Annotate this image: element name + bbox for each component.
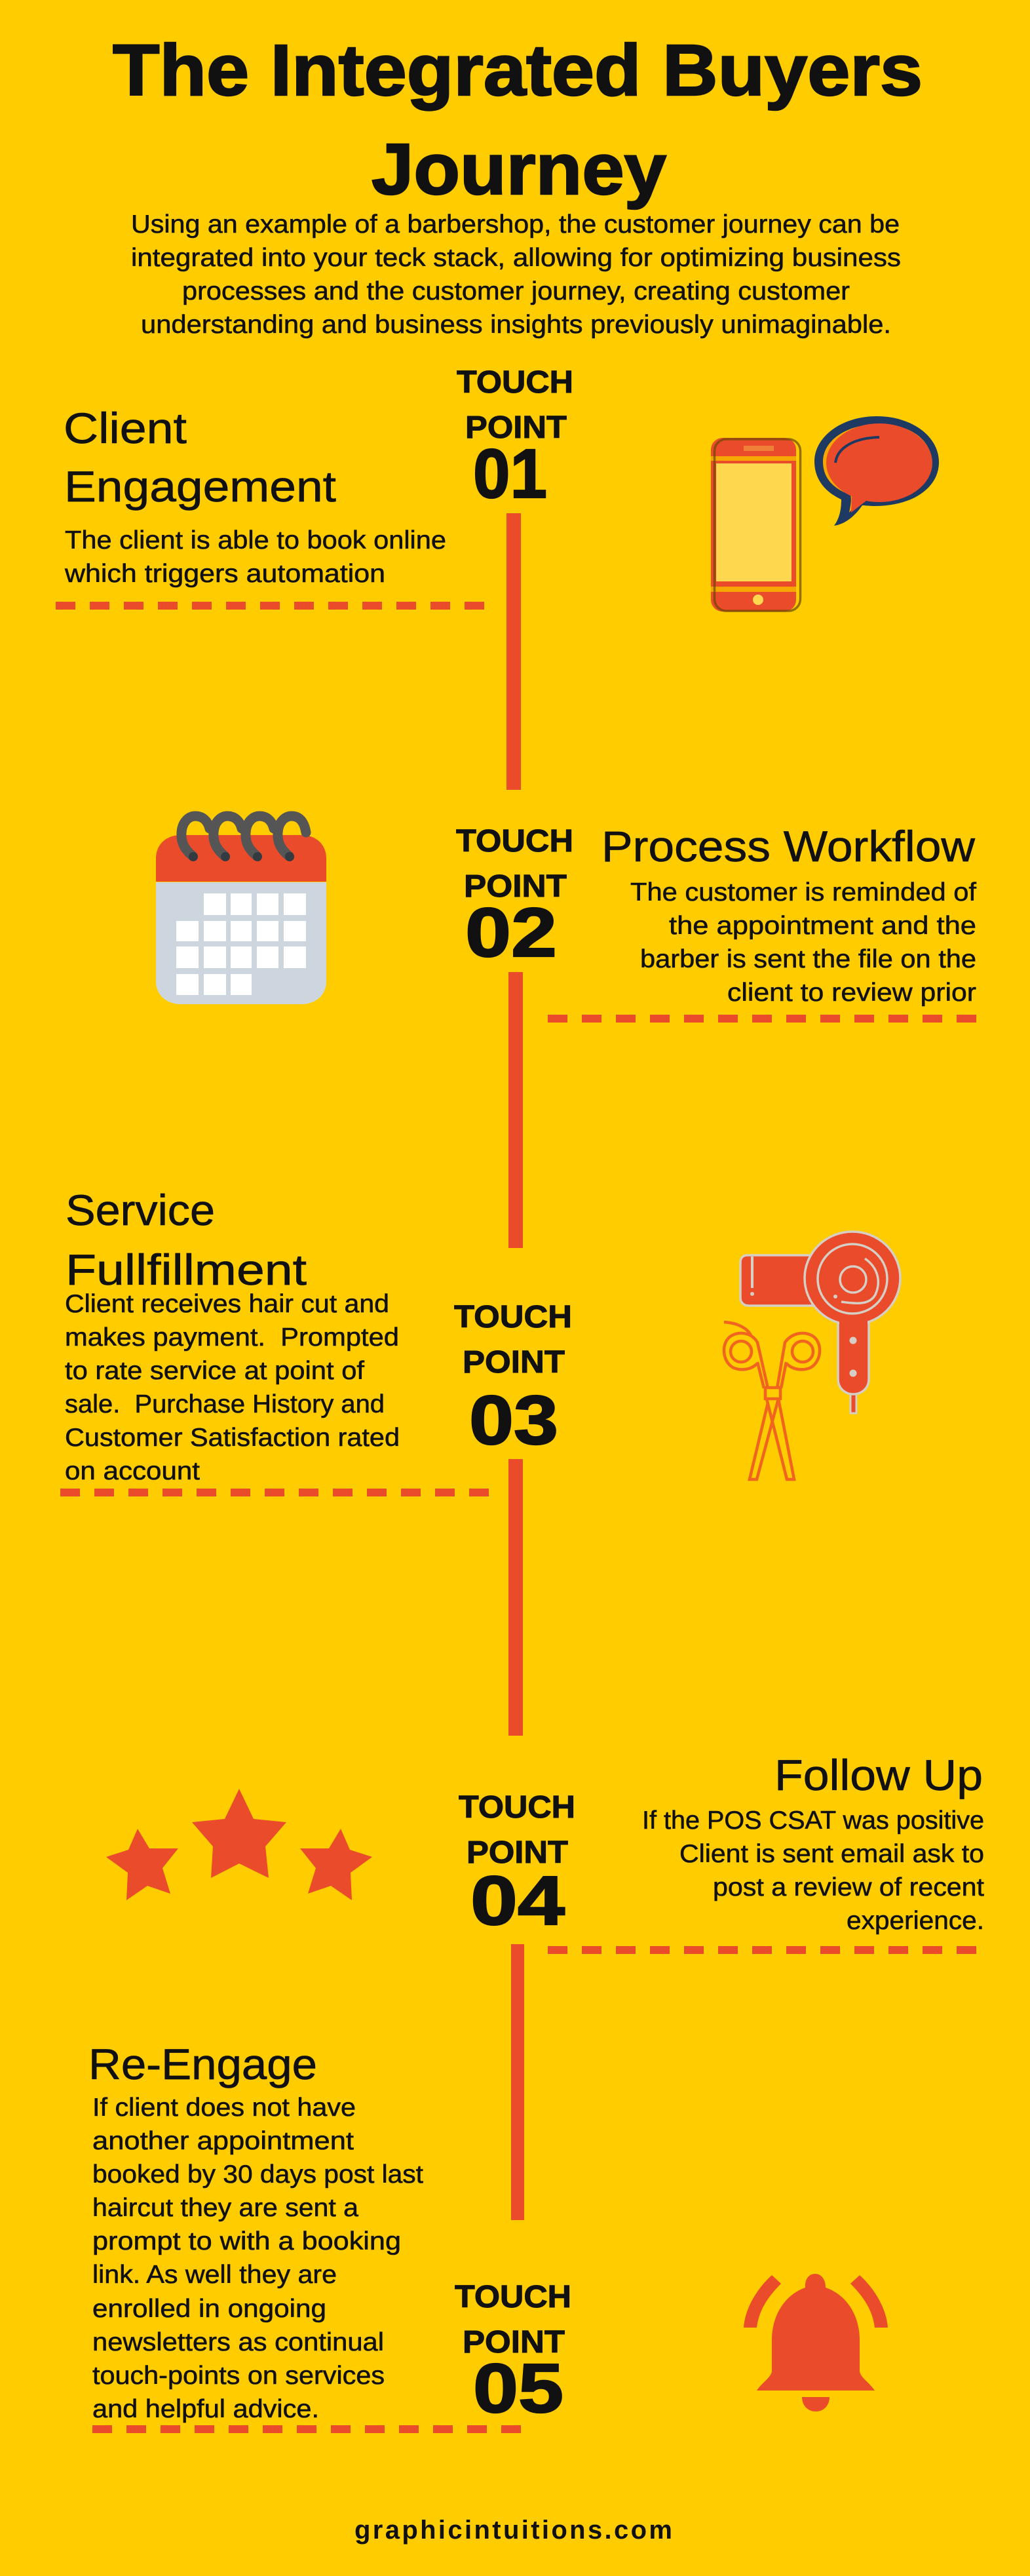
intro text: Using an example of a barbershop, the customer journey can be <box>131 210 900 239</box>
footer: website: graphicintuitions.com <box>354 2516 672 2545</box>
re-engage text: If client does not have <box>92 2094 356 2122</box>
touch point 02 label: POINT <box>464 869 567 904</box>
touch point 01 label: POINT <box>465 410 567 445</box>
panel: touch point 02 <box>156 816 976 1248</box>
intro text: integrated into your teck stack, allowing for optimizing business <box>131 244 901 272</box>
title: The Integrated Buyers <box>113 30 923 111</box>
touch point 05 label: 05 <box>473 2350 563 2427</box>
touch point 01 label: TOUCH <box>457 365 573 400</box>
service fullfillment text <box>65 1290 400 1485</box>
re-engage text: touch-points on services <box>92 2362 385 2390</box>
heading: follow up: Follow Up <box>774 1751 983 1799</box>
touch point 04 label: 04 <box>470 1862 565 1940</box>
client engagement text: which triggers automation <box>64 560 385 588</box>
touch point 05 label: TOUCH <box>455 2280 571 2314</box>
touch point 03 label <box>454 1300 572 1459</box>
touch point 04 label: TOUCH <box>459 1790 575 1825</box>
panel: touch point 01 <box>56 365 939 790</box>
title <box>113 30 923 210</box>
icon: speech bubble <box>814 416 939 526</box>
service fullfillment text: to rate service at point of <box>65 1357 364 1385</box>
follow up text: experience. <box>847 1907 984 1935</box>
service fullfillment text: makes payment. Prompted <box>65 1323 399 1352</box>
re-engage text: and helpful advice. <box>92 2395 319 2423</box>
timeline segment 01 <box>506 513 521 790</box>
process workflow text: the appointment and the <box>669 912 976 940</box>
touch point 05 label <box>455 2280 571 2427</box>
panel: touch point 04 <box>106 1751 984 2220</box>
heading: client engagement <box>64 404 336 511</box>
icon: bell <box>744 2274 888 2411</box>
touch point 01 label: 01 <box>473 435 547 513</box>
dashed connector 01 <box>56 602 484 610</box>
icon: hair dryer <box>740 1232 900 1413</box>
intro text: processes and the customer journey, creating customer <box>182 277 850 305</box>
follow up text <box>642 1806 984 1935</box>
touch point 03 label: TOUCH <box>454 1300 572 1335</box>
re-engage text: booked by 30 days post last <box>92 2160 423 2189</box>
re-engage text: haircut they are sent a <box>92 2194 358 2222</box>
process workflow text: barber is sent the file on the <box>640 945 976 973</box>
follow up text: post a review of recent <box>713 1873 984 1902</box>
heading: re-engage: Re-Engage <box>88 2040 317 2088</box>
touch point 02 label: TOUCH <box>456 824 573 859</box>
timeline segment 02 <box>508 972 523 1248</box>
touch point 04 label: POINT <box>467 1835 568 1870</box>
heading: service fullfillment <box>66 1186 307 1294</box>
re-engage text: enrolled in ongoing <box>92 2295 326 2323</box>
service fullfillment text: sale. Purchase History and <box>65 1390 385 1418</box>
dashed connector 02 <box>548 1015 976 1023</box>
service fullfillment text: Customer Satisfaction rated <box>65 1424 400 1452</box>
touch point 04 label <box>459 1790 575 1940</box>
heading: process workflow: Process Workflow <box>601 822 975 870</box>
follow up text: If the POS CSAT was positive <box>642 1806 984 1835</box>
touch point 02 label <box>456 824 573 971</box>
re-engage text: prompt to with a booking <box>92 2227 401 2255</box>
re-engage text: another appointment <box>92 2127 354 2155</box>
client engagement text <box>64 526 446 588</box>
dashed connector 05 <box>92 2425 521 2433</box>
re-engage text <box>92 2094 423 2423</box>
icon: three stars <box>106 1789 372 1900</box>
client engagement text: The client is able to book online <box>65 526 446 555</box>
re-engage text: newsletters as continual <box>92 2328 384 2356</box>
dashed connector 04 <box>548 1946 976 1954</box>
icon: scissors <box>724 1322 820 1479</box>
intro text <box>131 210 901 339</box>
dashed connector 03 <box>60 1489 489 1496</box>
icon: smartphone <box>711 438 801 612</box>
service fullfillment text: Client receives hair cut and <box>65 1290 389 1318</box>
heading: client engagement: Client <box>64 404 187 452</box>
re-engage text: link. As well they are <box>92 2261 337 2289</box>
touch point 02 label: 02 <box>465 894 557 971</box>
timeline segment 04 <box>511 1944 524 2220</box>
panel: touch point 03 <box>60 1186 900 1736</box>
title: Journey <box>372 129 666 210</box>
panel: touch point 05 <box>88 2040 888 2429</box>
process workflow text: client to review prior <box>727 979 976 1007</box>
intro text: understanding and business insights previously unimaginable. <box>141 311 891 339</box>
heading: client engagement: Engagement <box>64 462 336 511</box>
heading: service fullfillment: Fullfillment <box>66 1245 307 1294</box>
service fullfillment text: on account <box>65 1457 200 1485</box>
touch point 01 label <box>457 365 573 513</box>
touch point 03 label: 03 <box>469 1382 558 1459</box>
process workflow text <box>630 878 976 1007</box>
process workflow text: The customer is reminded of <box>630 878 976 907</box>
timeline segment 03 <box>508 1459 523 1736</box>
icon: calendar <box>156 816 326 1004</box>
touch point 03 label: POINT <box>463 1345 565 1380</box>
heading: service fullfillment: Service <box>66 1186 215 1234</box>
follow up text: Client is sent email ask to <box>679 1840 984 1868</box>
touch point 05 label: POINT <box>463 2325 565 2360</box>
